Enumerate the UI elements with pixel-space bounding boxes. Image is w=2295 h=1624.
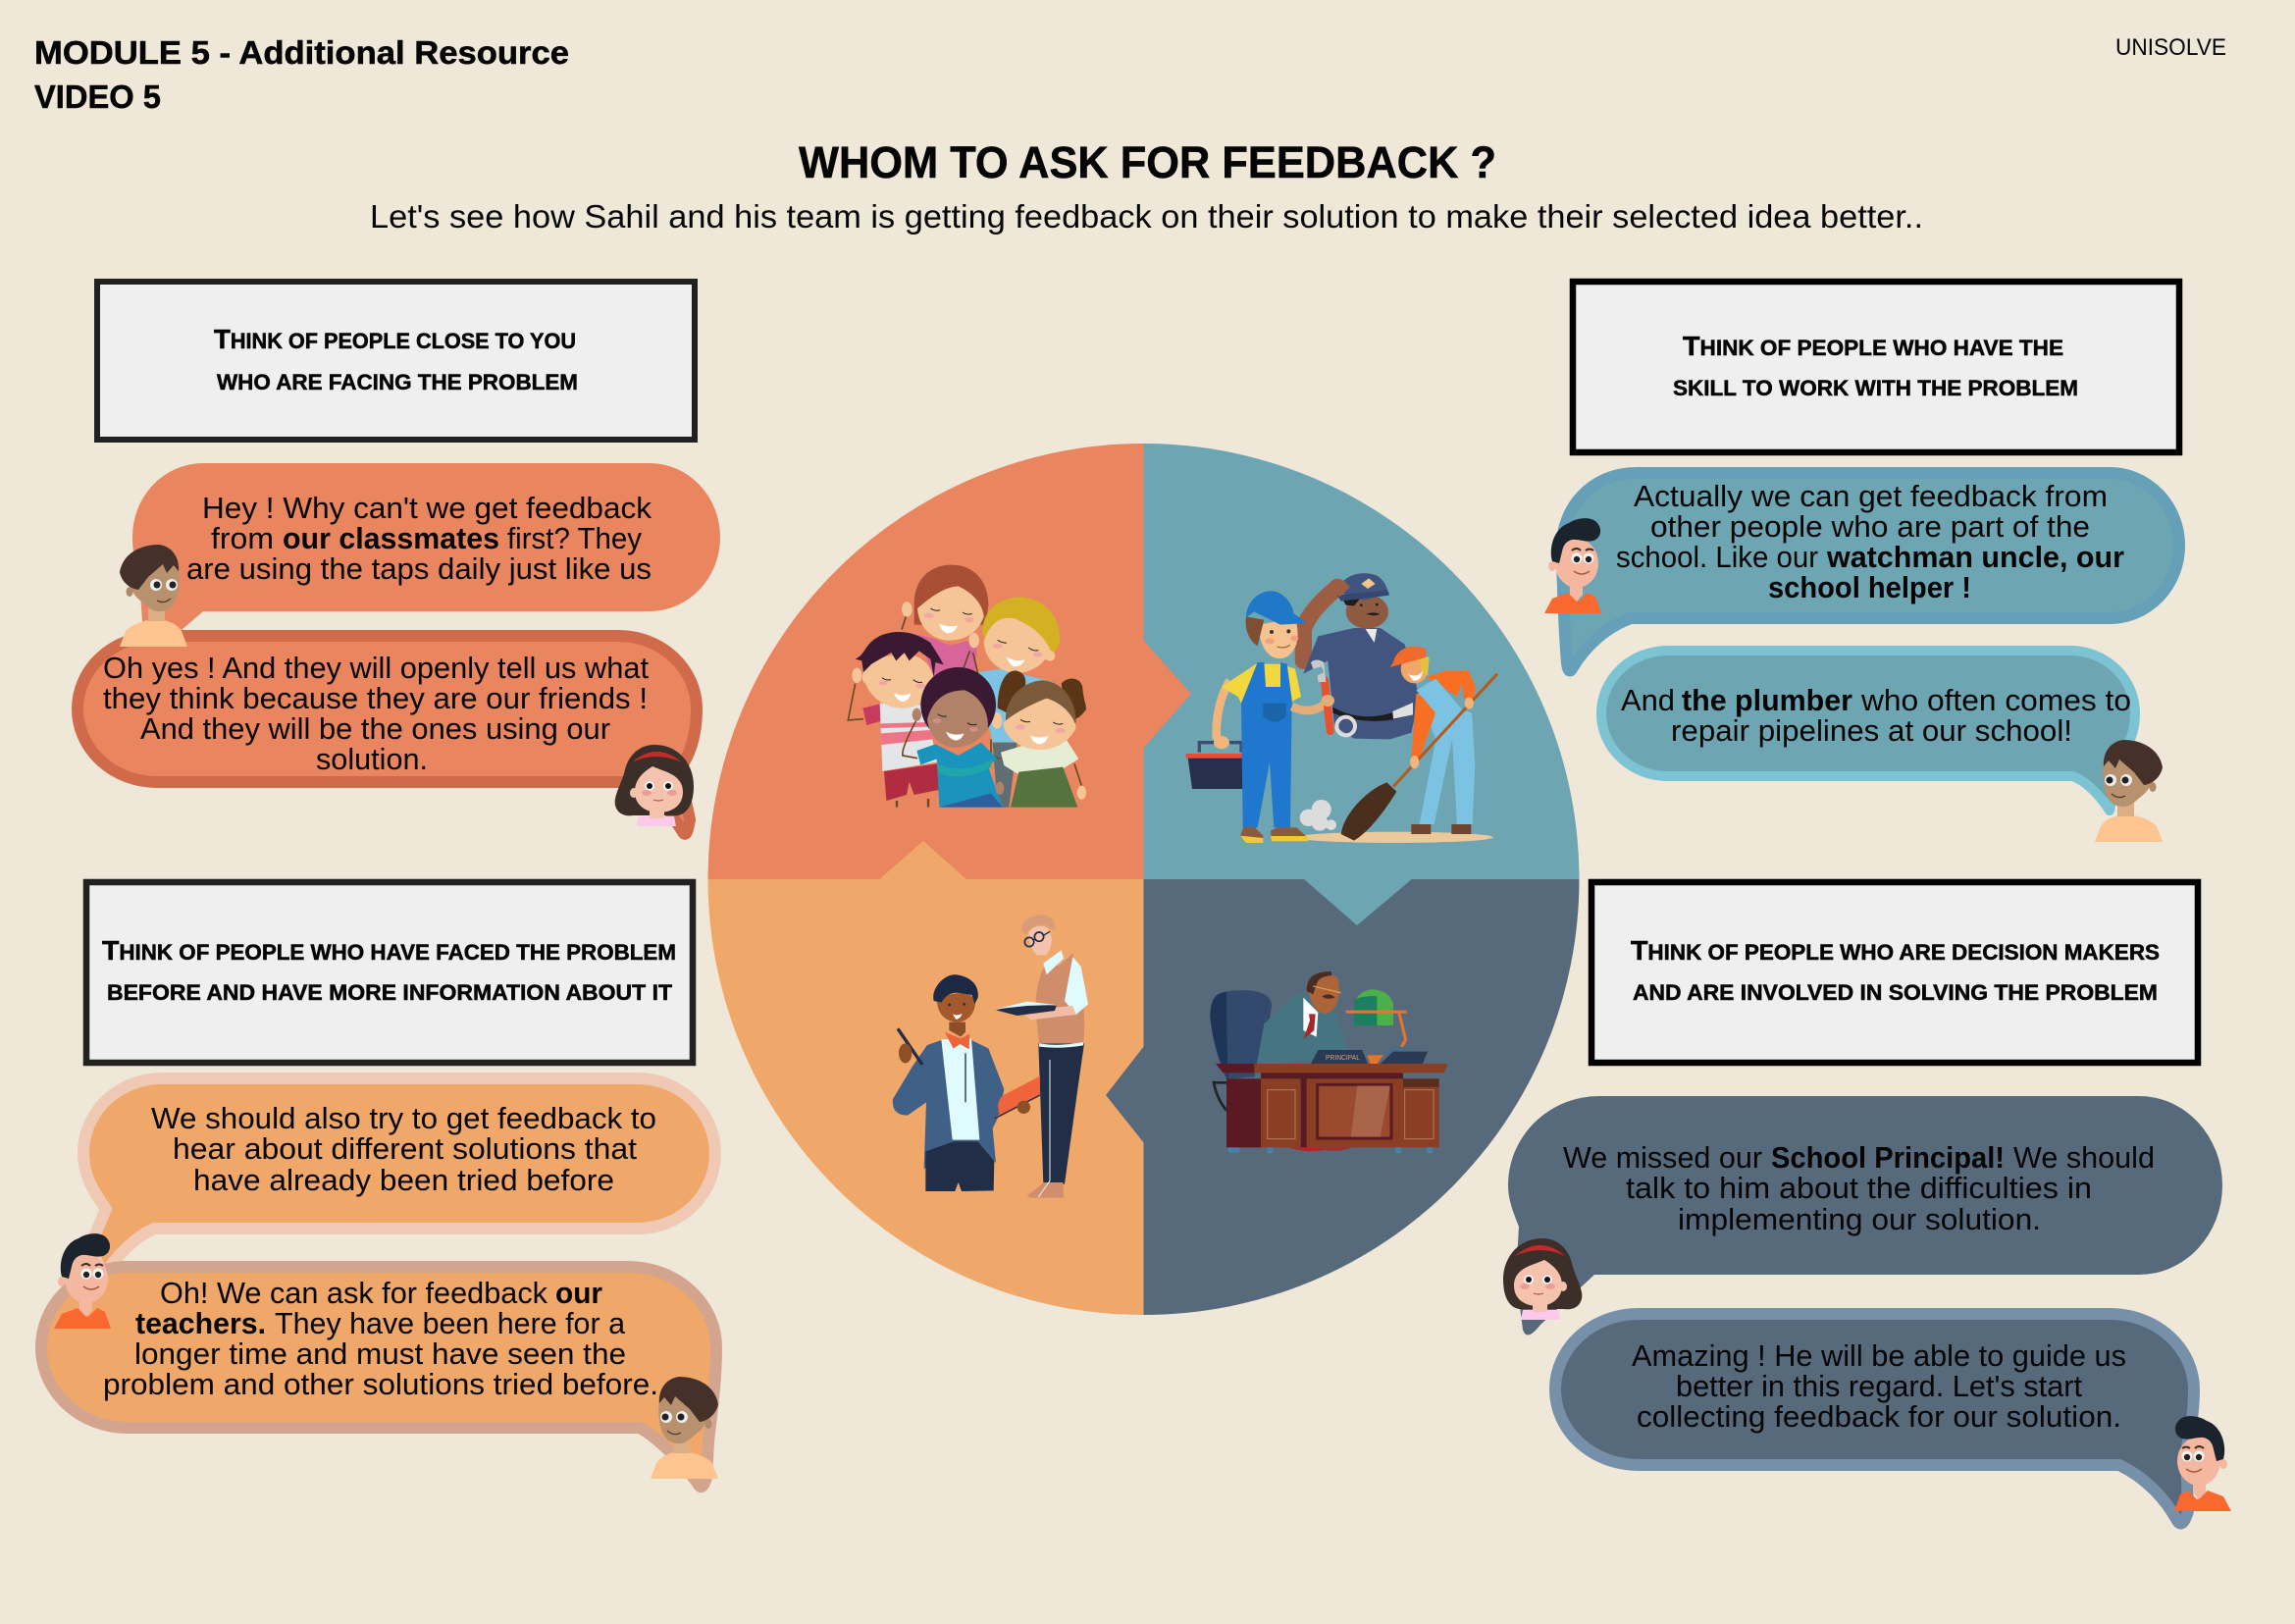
illustration: classmates group — [848, 565, 1086, 808]
panel: close to you: WHO ARE FACING THE PROBLEM — [217, 370, 578, 394]
quadrant: teal — [1144, 444, 1580, 879]
panel: faced the problem before: THINK OF PEOPLE WHO HAVE FACED THE PROBLEM — [102, 935, 676, 966]
speech bubble: classmates: are using the taps daily just like us — [186, 551, 652, 586]
panel: decision makers: AND ARE INVOLVED IN SOLVING THE PROBLEM — [1633, 980, 2158, 1005]
speech bubble: watchman: school. Like our — [1616, 540, 1818, 574]
speech bubble: watchman: Actually we can get feedback from — [1634, 479, 2108, 513]
panel: skilled people — [1573, 282, 2179, 452]
speech bubble: watchman: other people who are part of the — [1650, 509, 2090, 544]
module heading: VIDEO 5 — [34, 79, 161, 115]
panel: close to you — [97, 282, 695, 440]
illustration: principal at desk — [1210, 971, 1448, 1153]
character: black-haired boy — [2174, 1416, 2231, 1511]
speech bubble: teachers: longer time and must have seen the — [134, 1336, 626, 1371]
speech bubble: school principal — [1508, 1096, 2222, 1335]
speech bubble: school principal: talk to him about the difficulties in — [1626, 1171, 2092, 1205]
speech bubble: friends: they think because they are our friends ! — [103, 681, 648, 715]
speech bubble: friends: Oh yes ! And they will openly tell us what — [103, 651, 649, 685]
panel: decision makers — [1591, 882, 2198, 1063]
quadrant: slate — [1144, 879, 1580, 1315]
speech bubble: plumber: who often comes to — [1860, 683, 2131, 717]
character: brown-haired boy — [2095, 740, 2163, 842]
speech bubble: other solutions: have already been tried before — [193, 1163, 614, 1197]
speech bubble: classmates: our classmates — [283, 521, 499, 555]
speech bubble: plumber: the plumber — [1682, 683, 1852, 717]
character: girl — [1503, 1238, 1582, 1320]
speech bubble: plumber: And — [1621, 683, 1675, 717]
speech bubble: school principal: School Principal! — [1771, 1140, 2005, 1175]
speech bubble: start collecting: better in this regard. Let's start — [1676, 1369, 2082, 1403]
module heading: MODULE 5 - Additional Resource — [34, 34, 569, 71]
speech bubble: classmates: Hey ! Why can't we get feedback — [202, 491, 652, 525]
character: brown-haired boy — [120, 545, 187, 647]
illustration: plumber, watchman and helper — [1186, 573, 1497, 843]
panel: skilled people: THINK OF PEOPLE WHO HAVE THE — [1683, 331, 2063, 361]
quadrant: peach — [708, 879, 1144, 1315]
illustration: principal at desk: PRINCIPAL — [1326, 1053, 1360, 1062]
central quadrant wheel — [708, 444, 1580, 1315]
panel: faced the problem before — [86, 882, 693, 1063]
speech bubble: classmates — [132, 463, 720, 636]
panel: close to you: THINK OF PEOPLE CLOSE TO YOU — [214, 324, 576, 354]
speech bubble: teachers: They have been here for a — [275, 1306, 626, 1340]
title: WHOM TO ASK FOR FEEDBACK ? — [799, 137, 1496, 187]
subtitle: Let's see how Sahil and his team is getting feedback on their solution to make their selected idea better.. — [370, 198, 1923, 235]
speech bubble: other solutions: We should also try to get feedback to — [151, 1101, 656, 1135]
speech bubble: watchman: watchman uncle, our — [1826, 540, 2124, 574]
speech bubble: start collecting: collecting feedback for our solution. — [1637, 1399, 2121, 1434]
character: black-haired boy — [54, 1233, 111, 1329]
speech bubble: watchman: school helper ! — [1768, 570, 1971, 604]
panel: decision makers: THINK OF PEOPLE WHO ARE DECISION MAKERS — [1631, 935, 2160, 966]
speech bubble: other solutions: hear about different solutions that — [173, 1131, 637, 1166]
module heading — [34, 34, 569, 115]
character: brown-haired boy — [651, 1377, 718, 1479]
speech bubble: school principal: implementing our solution. — [1678, 1202, 2041, 1236]
arrow: peach to coral — [878, 841, 967, 880]
character: black-haired boy — [1544, 518, 1601, 613]
speech bubble: classmates: from — [211, 521, 274, 555]
illustration: teachers — [893, 915, 1088, 1198]
speech bubble: teachers: our — [555, 1276, 602, 1310]
speech bubble: other solutions — [83, 1078, 715, 1276]
brand label: UNISOLVE — [2115, 34, 2226, 61]
arrow: teal to slate — [1303, 878, 1413, 925]
arrow: slate to peach — [1106, 1046, 1144, 1143]
speech bubble: friends: solution. — [316, 742, 428, 776]
speech bubble: watchman — [1562, 473, 2179, 670]
speech bubble: school principal: We missed our — [1563, 1140, 1762, 1175]
speech bubble: start collecting: Amazing ! He will be able to guide us — [1632, 1338, 2126, 1373]
speech bubble: teachers — [41, 1267, 716, 1487]
panel: faced the problem before: BEFORE AND HAVE MORE INFORMATION ABOUT IT — [107, 980, 673, 1005]
speech bubble: friends — [78, 636, 697, 834]
speech bubble: classmates: first? They — [507, 521, 642, 555]
panel: skilled people: SKILL TO WORK WITH THE PROBLEM — [1673, 376, 2078, 400]
character: girl — [615, 745, 694, 826]
quadrant: coral — [708, 444, 1144, 879]
speech bubble: school principal: We should — [2013, 1140, 2155, 1175]
speech bubble: plumber: repair pipelines at our school! — [1671, 713, 2072, 748]
speech bubble: start collecting — [1555, 1314, 2194, 1523]
speech bubble: teachers: teachers. — [135, 1306, 266, 1340]
speech bubble: plumber — [1601, 651, 2135, 811]
speech bubble: teachers: problem and other solutions tried before. — [103, 1367, 658, 1401]
speech bubble: friends: And they will be the ones using our — [140, 711, 610, 746]
arrow: coral to teal — [1143, 640, 1191, 749]
speech bubble: teachers: Oh! We can ask for feedback — [160, 1276, 548, 1310]
